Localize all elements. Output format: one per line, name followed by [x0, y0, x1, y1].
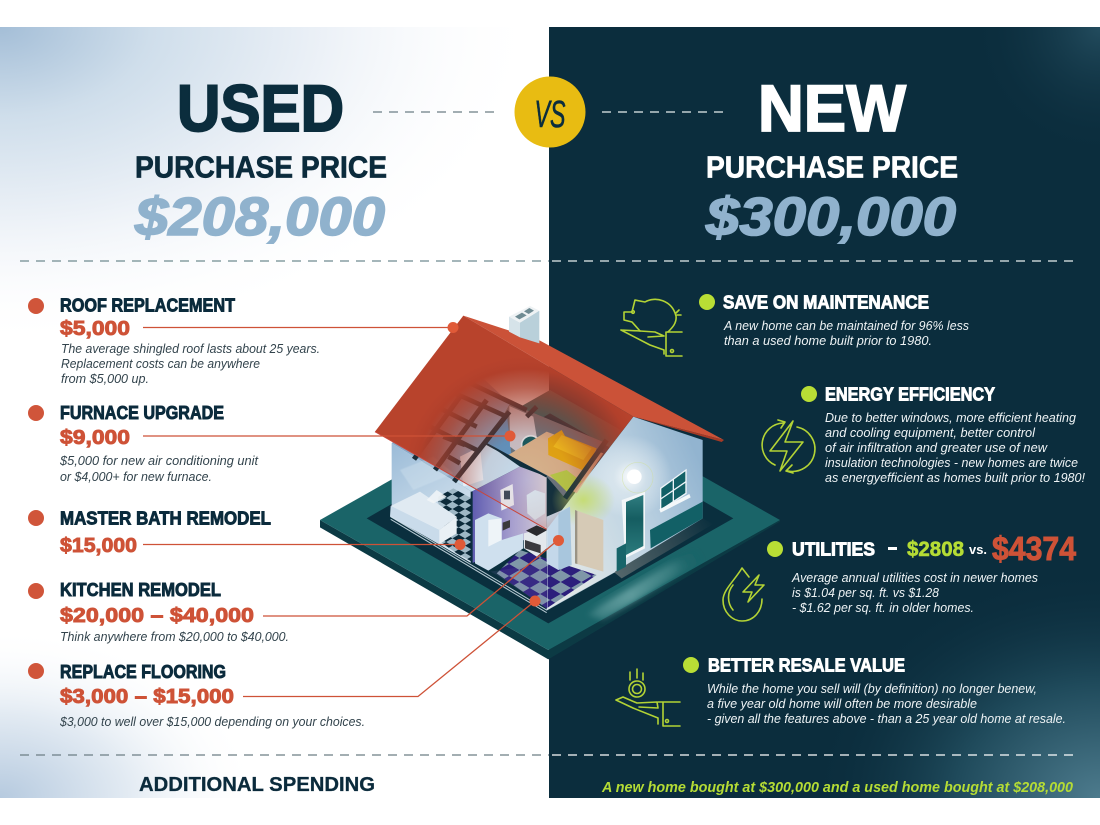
item: save on maintenance: than a used home built prior to 1980. — [724, 334, 932, 348]
item: utilities: $2808 — [907, 538, 964, 561]
kitchen — [391, 467, 615, 613]
item: roof replacement: ROOF REPLACEMENT — [60, 294, 236, 316]
title: NEW: NEW — [758, 71, 907, 145]
item: energy efficiency: as energyefficient as homes built prior to 1980! — [825, 471, 1086, 485]
badge: versus — [514, 76, 586, 148]
icon: piggy bank in hand — [621, 299, 682, 356]
item: master bath remodel: $15,000 — [60, 534, 137, 557]
roof: main face — [375, 316, 633, 529]
badge: versus: VS — [534, 94, 566, 136]
item: energy efficiency: and cooling equipment, better control — [825, 426, 1036, 440]
roof: side slab — [463, 316, 724, 440]
title: USED: USED — [177, 71, 344, 145]
icon: utilities drop — [723, 568, 764, 621]
footer: additional spending: ADDITIONAL SPENDING — [139, 774, 375, 796]
panel: used home background — [0, 27, 549, 798]
item: energy efficiency: Due to better windows, more efficient heating — [825, 411, 1076, 425]
upstairs room — [487, 403, 607, 500]
item: energy efficiency: ENERGY EFFICIENCY — [825, 384, 996, 404]
label: used purchase price: PURCHASE PRICE — [135, 150, 387, 184]
item: master bath remodel: MASTER BATH REMODEL — [60, 508, 271, 528]
item: save on maintenance — [699, 292, 969, 348]
platform — [320, 390, 780, 659]
item: utilities: is $1.04 per sq. ft. vs $1.28 — [792, 586, 939, 600]
house illustration — [320, 306, 780, 659]
item: roof replacement: from $5,000 up. — [61, 372, 149, 386]
item: replace flooring: $3,000 to well over $15,000 depending on your choices. — [59, 715, 365, 729]
window — [659, 470, 691, 513]
footer: comparison note: A new home bought at $300,000 and a used home bought at $208,000 — [601, 779, 1074, 796]
item: kitchen remodel — [28, 579, 289, 644]
wall lamp — [622, 462, 653, 493]
panel: new home background — [549, 27, 1100, 798]
item: kitchen remodel: $20,000 – $40,000 — [60, 604, 254, 627]
item: energy efficiency: of air infiltration and greater use of new — [825, 441, 1048, 455]
item: roof replacement: Replacement costs can be anywhere — [61, 357, 260, 371]
roof — [375, 306, 724, 529]
item: furnace upgrade: $5,000 for new air conditioning unit — [59, 454, 259, 468]
item: kitchen remodel: Think anywhere from $20,000 to $40,000. — [60, 630, 289, 644]
heading: new — [705, 71, 958, 247]
heading: used — [134, 71, 387, 247]
item: save on maintenance: SAVE ON MAINTENANCE — [723, 292, 929, 312]
icon: energy bolt — [762, 420, 815, 473]
bathroom — [390, 443, 483, 563]
chimney — [509, 306, 539, 343]
ground glow — [590, 557, 684, 620]
item: better resale value: While the home you sell will (by definition) no longer benew, — [707, 682, 1037, 696]
item: replace flooring: REPLACE FLOORING — [60, 661, 226, 682]
item: better resale value: BETTER RESALE VALUE — [708, 654, 905, 676]
label: new purchase price: PURCHASE PRICE — [706, 150, 958, 184]
item: furnace upgrade: FURNACE UPGRADE — [60, 402, 224, 423]
item: utilities: $4374 — [992, 530, 1077, 567]
item: furnace upgrade — [28, 402, 259, 484]
value: used price: $208,000 — [134, 187, 385, 247]
item: master bath remodel — [28, 508, 271, 557]
interior back walls — [392, 360, 520, 492]
item: utilities — [767, 530, 1077, 615]
item: furnace upgrade: $9,000 — [60, 426, 130, 449]
item: better resale value: - given all the features above - than a 25 year old home at resale. — [707, 712, 1066, 726]
icon: hand with coin — [616, 669, 680, 726]
item: better resale value — [683, 654, 1066, 726]
item: roof replacement — [28, 294, 320, 386]
item: energy efficiency: insulation technologies - new homes are twice — [825, 456, 1078, 470]
item: energy efficiency — [801, 384, 1086, 485]
dashed dividers — [20, 112, 1080, 755]
callouts: leader lines and pins — [143, 322, 564, 696]
item: utilities: - $1.62 per sq. ft. in older homes. — [792, 601, 974, 615]
item: kitchen remodel: KITCHEN REMODEL — [60, 579, 221, 600]
item: replace flooring: $3,000 – $15,000 — [60, 685, 234, 708]
item: better resale value: a five year old home will often be more desirable — [707, 697, 977, 711]
door — [617, 492, 645, 572]
item: furnace upgrade: or $4,000+ for new furnace. — [60, 470, 212, 484]
item: utilities: Average annual utilities cost in newer homes — [791, 571, 1038, 585]
value: new price: $300,000 — [705, 187, 956, 247]
rafters — [410, 378, 607, 498]
item: utilities: vs. — [969, 543, 987, 557]
item: utilities: UTILITIES — [792, 538, 875, 560]
item: save on maintenance: A new home can be maintained for 96% less — [723, 319, 969, 333]
item: replace flooring — [28, 661, 365, 729]
item: roof replacement: The average shingled roof lasts about 25 years. — [61, 342, 320, 356]
right wall — [547, 417, 703, 610]
item: roof replacement: $5,000 — [60, 317, 130, 340]
